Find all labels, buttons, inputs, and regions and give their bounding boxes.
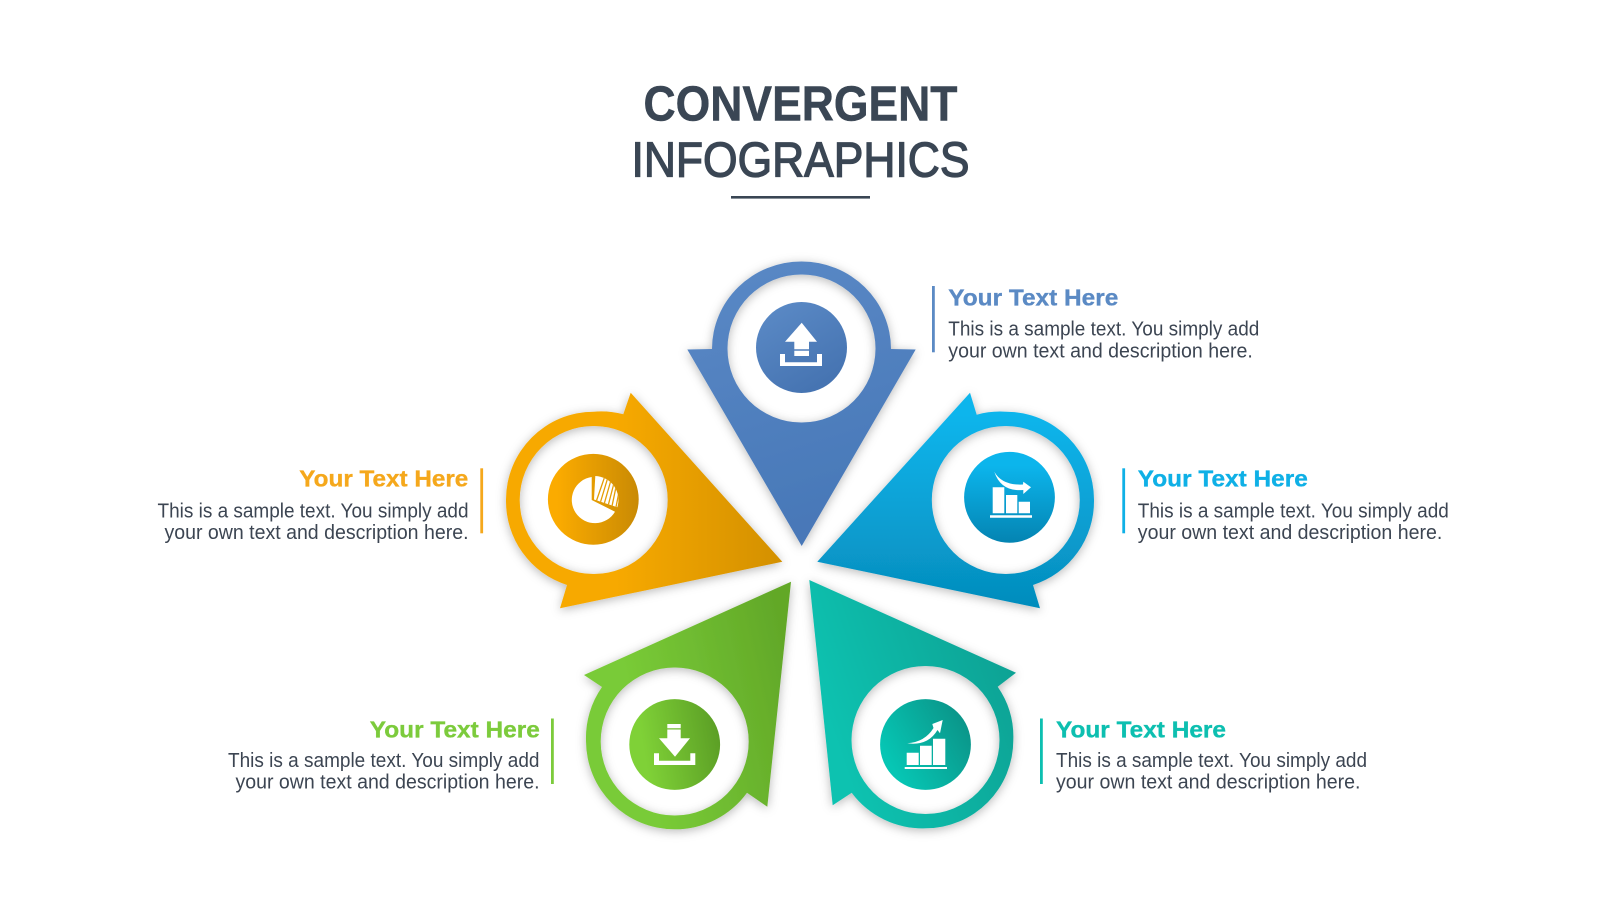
description xyxy=(1056,750,1367,794)
pointer: green xyxy=(584,582,791,829)
green inner circle xyxy=(629,699,720,790)
icon: download xyxy=(654,724,695,765)
heading: Your Text Here xyxy=(948,285,1118,311)
description xyxy=(158,500,468,544)
description xyxy=(228,750,540,794)
pointer: cyan xyxy=(817,393,1094,608)
orange pin shape xyxy=(506,393,782,608)
accent bar xyxy=(932,286,935,352)
description: This is a sample text. You simply add xyxy=(1056,750,1367,772)
accent bar xyxy=(1040,718,1043,784)
description: This is a sample text. You simply add xyxy=(228,750,540,772)
text block: cyan xyxy=(1122,466,1449,544)
heading: Your Text Here xyxy=(299,466,468,492)
blue pin shape xyxy=(687,262,916,546)
title line: INFOGRAPHICS: INFOGRAPHICS xyxy=(632,134,970,188)
cyan inner circle xyxy=(964,452,1055,543)
teal inner circle xyxy=(880,699,971,790)
description: your own text and description here. xyxy=(164,522,468,544)
description xyxy=(948,319,1259,362)
title line: CONVERGENT: CONVERGENT xyxy=(644,78,958,132)
description: your own text and description here. xyxy=(1138,522,1442,544)
pointer: orange xyxy=(506,393,782,608)
icon: rising bars xyxy=(905,720,947,769)
text block: orange xyxy=(158,466,483,544)
description: This is a sample text. You simply add xyxy=(948,319,1259,341)
description: your own text and description here. xyxy=(948,340,1253,362)
heading: Your Text Here xyxy=(1056,717,1226,743)
cyan pin shape xyxy=(817,393,1094,608)
title xyxy=(632,78,970,199)
teal pin shape xyxy=(809,580,1016,828)
description: This is a sample text. You simply add xyxy=(1138,500,1449,522)
text block: teal xyxy=(1040,717,1367,794)
text block: blue xyxy=(932,285,1259,362)
description xyxy=(1138,500,1449,544)
pointer: teal xyxy=(809,580,1016,828)
heading: Your Text Here xyxy=(370,717,540,743)
icon: declining bars xyxy=(990,472,1032,518)
blue inner circle xyxy=(756,302,847,393)
orange inner circle xyxy=(548,454,639,545)
description: your own text and description here. xyxy=(236,772,540,794)
accent bar xyxy=(1122,468,1125,533)
pointer: blue xyxy=(687,262,916,546)
description: This is a sample text. You simply add xyxy=(158,500,468,522)
description: your own text and description here. xyxy=(1056,772,1360,794)
title underline xyxy=(731,196,870,199)
icon: pie chart xyxy=(572,473,619,523)
icon: upload xyxy=(780,323,822,366)
text block: green xyxy=(228,717,554,794)
green pin shape xyxy=(584,582,791,829)
accent bar xyxy=(480,468,483,533)
accent bar xyxy=(551,718,554,784)
heading: Your Text Here xyxy=(1138,466,1308,492)
